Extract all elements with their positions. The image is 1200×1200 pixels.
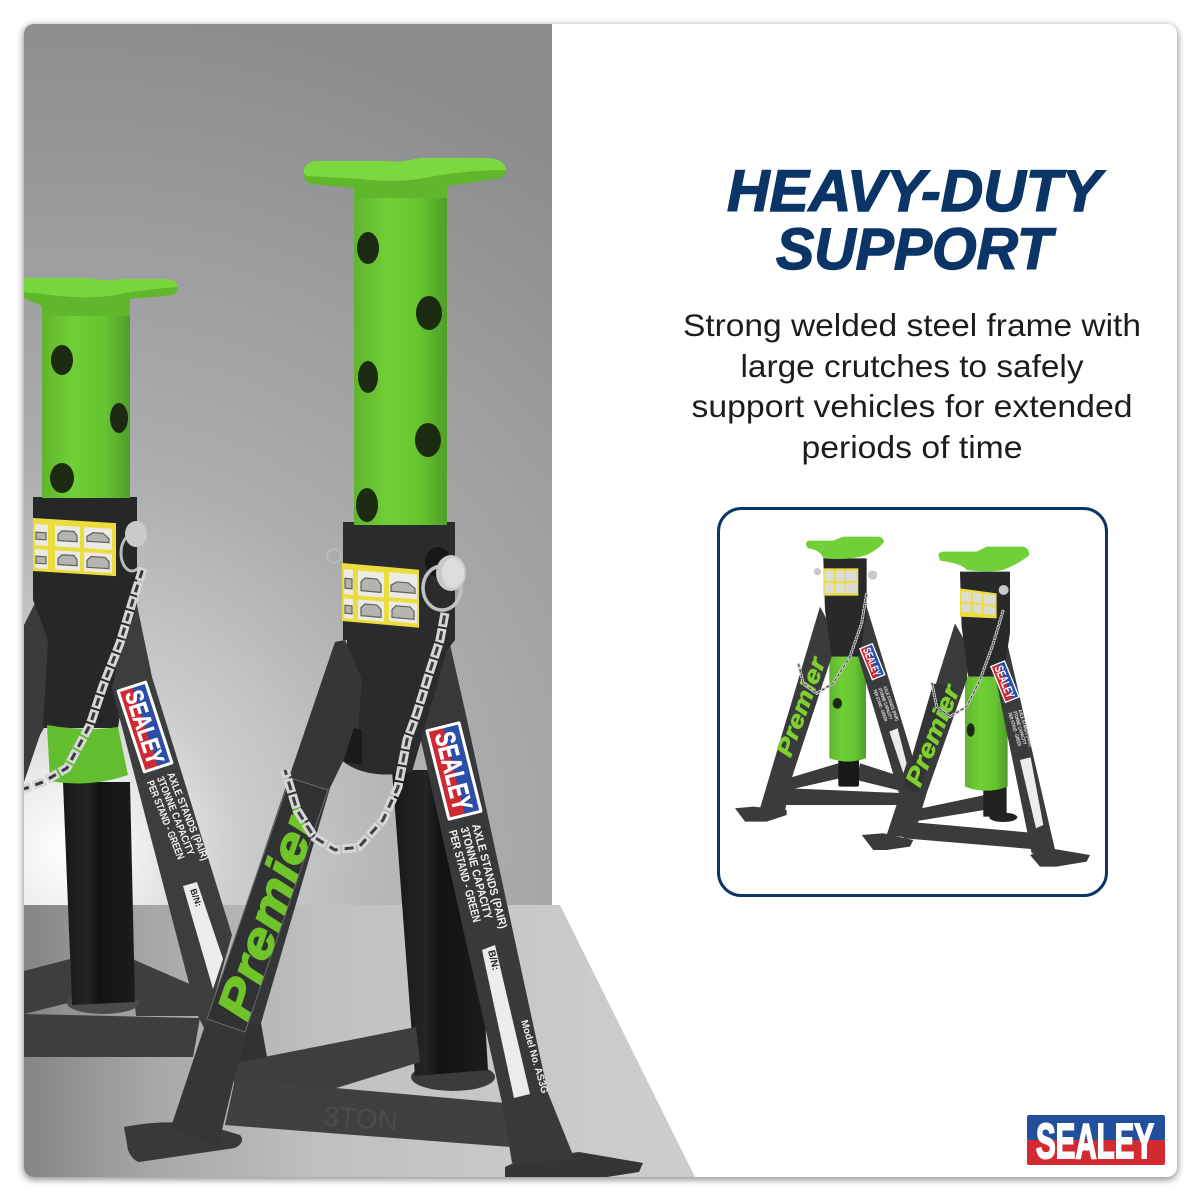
inset right stand left leg — [887, 623, 970, 838]
inset right stand green tube — [965, 677, 1008, 791]
rear stand lower black tube — [63, 782, 139, 1014]
rear stand green inner tube — [42, 312, 130, 498]
rear stand leg text: PER STAND - GREEN — [144, 779, 186, 861]
front stand right leg — [417, 640, 575, 1163]
front stand SEALEY badge — [425, 721, 483, 821]
front stand rear brace — [234, 1027, 420, 1090]
front stand leg description: AXLE STANDS (PAIR) — [469, 823, 509, 930]
inset right stand hole — [967, 723, 975, 737]
inset left stand green tube — [829, 657, 866, 762]
description text — [683, 307, 1141, 465]
inset pair of axle stands — [735, 537, 1090, 867]
rear stand collar and cone — [33, 497, 137, 728]
panel: axle stand photo — [24, 24, 695, 1177]
inset left stand SEALEY badge: SEALEY — [860, 646, 882, 678]
front stand collar and cone — [343, 522, 455, 775]
front stand left leg — [171, 640, 362, 1147]
inset right stand small leg text: AXLE STANDS (PAIR) — [1016, 709, 1033, 747]
rear stand left leg — [24, 604, 48, 782]
front stand tube holes — [356, 232, 442, 522]
rear stand tube holes — [50, 345, 128, 493]
inset: product image frame — [718, 508, 1106, 896]
inset right stand SEALEY badge: SEALEY — [991, 664, 1017, 701]
description text: large crutches to safely — [740, 348, 1084, 384]
front stand leg description: 3TONNE CAPACITY — [458, 826, 494, 921]
front stand model number: Model No. AS3G — [518, 1019, 550, 1095]
rear stand B/N label: B/N: — [188, 887, 204, 908]
inset left stand chain — [798, 593, 867, 693]
front stand white serial strip — [482, 945, 530, 1098]
rear stand base bars — [24, 958, 200, 1057]
rear axle stand — [24, 278, 232, 1057]
heading: SUPPORT — [776, 217, 1057, 282]
inset right stand label cells — [961, 591, 995, 615]
inset left stand Premier wordmark: Premier — [771, 653, 831, 760]
front stand leg description — [449, 825, 508, 928]
front stand right foot — [505, 1152, 643, 1177]
rear stand SEALEY badge: SEALEY — [119, 687, 169, 768]
description text: support vehicles for extended — [692, 388, 1132, 424]
inset left stand label — [823, 568, 858, 596]
inset right stand — [862, 547, 1090, 867]
inset right stand label — [960, 588, 997, 618]
front stand green saddle — [303, 158, 506, 198]
description text: periods of time — [802, 429, 1022, 465]
front stand leg rear flange — [240, 1023, 267, 1062]
rear stand warning label — [33, 518, 116, 576]
heading: HEAVY-DUTY — [727, 159, 1106, 224]
inset left stand small leg text: PER STAND - GREEN — [872, 689, 889, 722]
inset left stand pins — [814, 568, 877, 580]
inset left stand serial strip — [889, 728, 907, 773]
description text: Strong welded steel frame with — [683, 307, 1141, 343]
inset right stand SEALEY badge — [990, 660, 1020, 703]
inset right stand lower tube — [983, 787, 1017, 822]
front stand B/N label: B/N: — [485, 949, 501, 972]
inset left stand — [735, 537, 923, 822]
front stand SEALEY badge: SEALEY — [429, 729, 478, 814]
front stand leg fold shadow — [343, 728, 362, 765]
logo red band — [1027, 1140, 1165, 1165]
inset right stand right leg — [993, 633, 1057, 857]
inset left stand SEALEY badge — [859, 643, 886, 680]
rear stand leg text: AXLE STANDS (PAIR) — [164, 771, 211, 862]
Premier wordmark: Premier — [206, 799, 329, 1025]
inset right stand small leg text: PER STAND - GREEN — [1006, 712, 1022, 747]
inset left stand small leg text: 3TONNE CAPACITY — [877, 687, 894, 721]
heading — [727, 159, 1106, 282]
inset right stand small leg text — [1006, 709, 1033, 751]
front stand lower black tube and base disc — [392, 770, 495, 1091]
front stand left foot — [124, 1122, 242, 1162]
rear stand chain — [24, 568, 143, 789]
front axle stand — [124, 158, 643, 1177]
inset right stand chain — [932, 610, 1003, 717]
inset left stand lower tube — [838, 758, 859, 787]
inset border — [718, 508, 1106, 896]
inset left stand small leg text: AXLE STANDS (PAIR) — [882, 685, 900, 722]
rear stand right leg — [112, 605, 232, 1030]
inset left stand legs — [760, 607, 923, 812]
inset right stand collar — [960, 572, 1010, 677]
front stand chain — [285, 613, 445, 850]
inset right stand pin — [999, 585, 1009, 595]
front stand locking pin — [327, 547, 466, 610]
inset right stand base — [862, 793, 1090, 867]
front stand green inner tube — [354, 188, 447, 525]
rear stand leg text: 3TONNE CAPACITY — [154, 775, 197, 857]
front stand leg description: PER STAND - GREEN — [446, 829, 482, 924]
inset left stand saddle — [806, 537, 884, 559]
rear stand green saddle — [24, 278, 178, 316]
embossed capacity text: 3TON — [323, 1100, 399, 1137]
front stand front brace — [225, 1079, 510, 1147]
inset left stand base — [735, 763, 910, 822]
SEALEY logo — [1027, 1115, 1165, 1169]
rear stand white serial strip — [183, 882, 223, 989]
front stand warning label — [342, 563, 419, 628]
inset right stand Premier wordmark: Premier — [901, 680, 966, 791]
floor — [24, 905, 695, 1177]
logo blue band — [1027, 1115, 1165, 1141]
rear stand green lower band — [47, 725, 128, 783]
grey wall background — [24, 24, 552, 905]
inset left stand hole — [833, 698, 842, 709]
rear stand locking pin — [121, 521, 147, 571]
inset right stand saddle — [938, 547, 1029, 571]
Premier plate — [207, 778, 328, 1032]
inset right stand Premier plate — [903, 683, 953, 793]
inset left stand small leg text — [872, 685, 900, 725]
inset right stand small leg text: 3TONNE CAPACITY — [1011, 710, 1027, 746]
inset right stand serial strip — [1020, 757, 1043, 828]
inset left stand collar — [823, 558, 867, 657]
